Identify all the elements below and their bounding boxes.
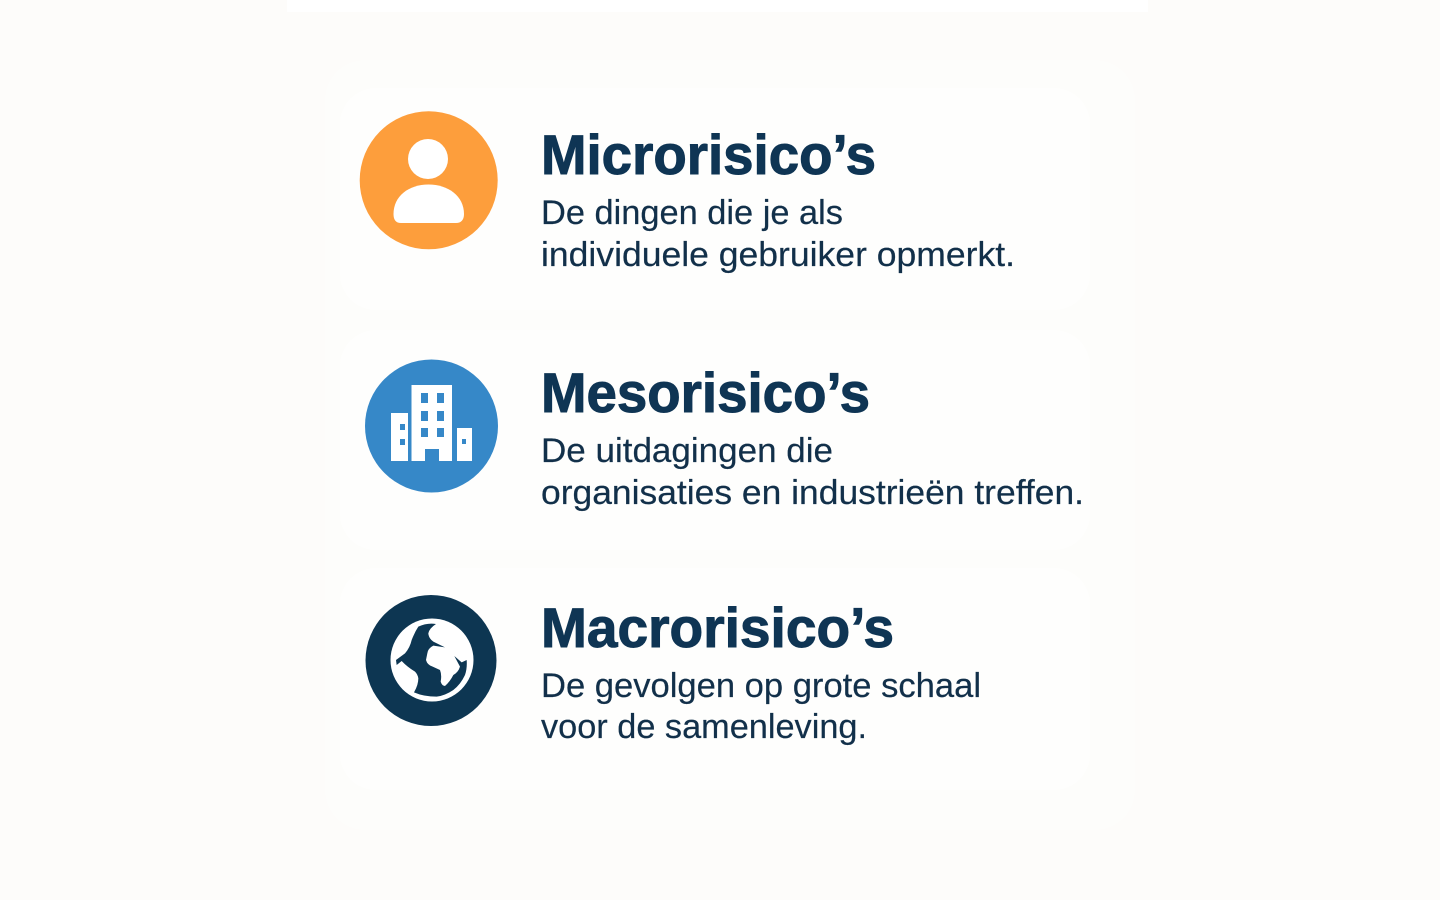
panel: microrisico's: [340, 88, 1090, 310]
panel: macrorisico's: [340, 568, 1090, 790]
text: mesorisico's description: De uitdagingen die: [541, 432, 833, 470]
text: microrisico's description: individuele gebruiker opmerkt.: [541, 236, 1015, 274]
icon: globe: [366, 595, 496, 726]
text: macrorisico's description: [541, 667, 981, 746]
panel: mesorisico's: [340, 330, 1090, 550]
icon: buildings: [365, 360, 498, 492]
text: mesorisico's description: [541, 432, 1084, 512]
heading: microrisico's: Microrisico’s: [541, 123, 876, 186]
text: microrisico's description: De dingen die je als: [541, 194, 843, 232]
text: macrorisico's description: De gevolgen op grote schaal: [541, 667, 981, 705]
text: mesorisico's description: organisaties en industrieën treffen.: [541, 474, 1084, 512]
heading: macrorisico's: Macrorisico’s: [541, 596, 894, 659]
text: microrisico's description: [541, 194, 1015, 274]
heading: mesorisico's: Mesorisico’s: [541, 361, 870, 424]
icon: person: [360, 111, 498, 249]
text: macrorisico's description: voor de samenleving.: [541, 708, 867, 746]
